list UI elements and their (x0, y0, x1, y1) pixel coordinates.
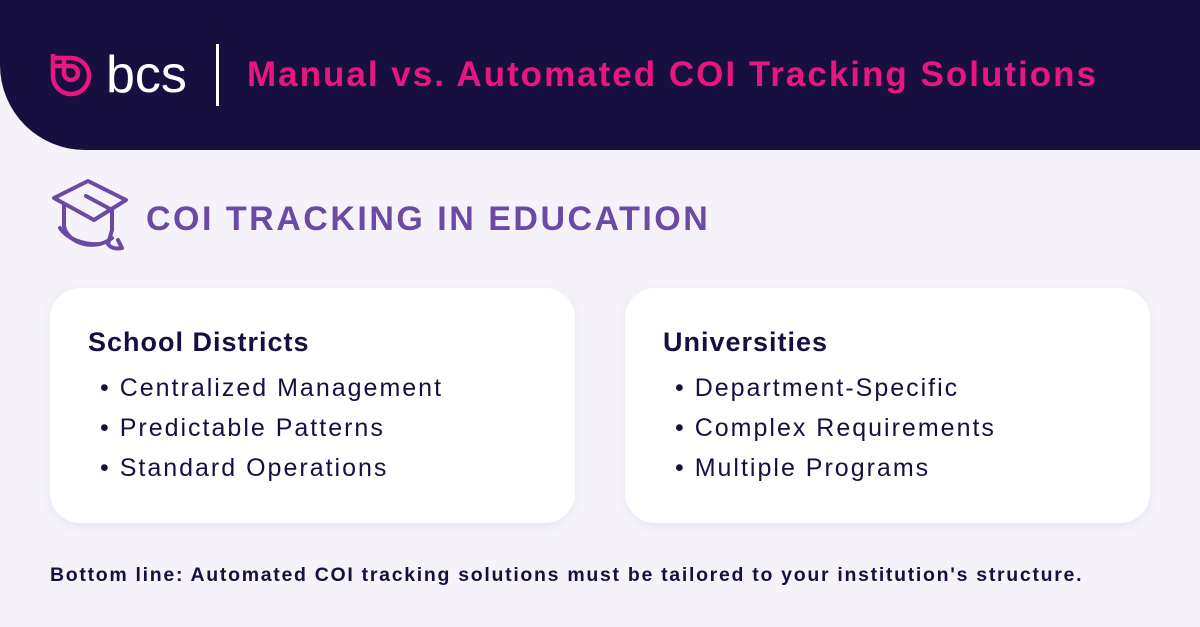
list: universities (675, 374, 996, 482)
list: universities: • Multiple Programs (675, 454, 930, 482)
logo icon (50, 54, 92, 96)
list: universities: • Department-Specific (675, 374, 959, 402)
panel: universities (625, 288, 1150, 523)
divider (216, 44, 219, 106)
heading: school districts: School Districts (88, 327, 310, 357)
bottom line text: Bottom line: Automated COI tracking solutions must be tailored to your institution's structure. (50, 564, 1083, 586)
list: school districts: • Standard Operations (100, 454, 388, 482)
heading: universities: Universities (663, 327, 828, 357)
title: Manual vs. Automated COI Tracking Solutions (247, 55, 1098, 94)
header band (0, 0, 1200, 150)
section heading: COI TRACKING IN EDUCATION (146, 200, 710, 238)
list: universities: • Complex Requirements (675, 414, 996, 442)
list: school districts: • Predictable Patterns (100, 414, 385, 442)
icon: graduation cap (52, 179, 128, 250)
list: school districts: • Centralized Management (100, 374, 443, 402)
list: school districts (100, 374, 443, 482)
panel: school districts (50, 288, 575, 523)
logo text: bcs (106, 46, 187, 104)
